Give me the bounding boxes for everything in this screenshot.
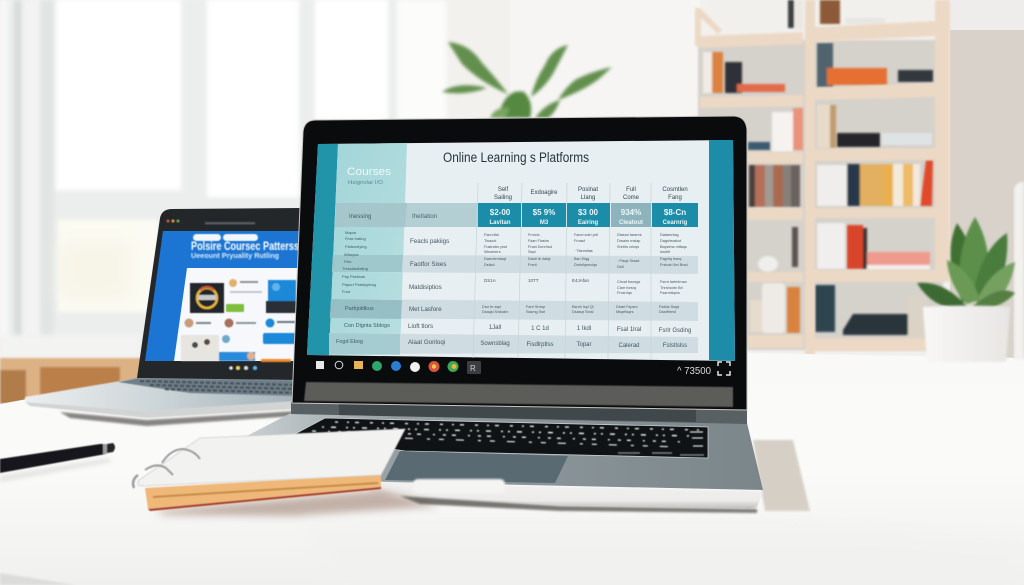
table cell text: Dataernlag bbox=[660, 233, 679, 237]
table cell text: Fract Dcnrhsd bbox=[528, 245, 552, 249]
price values: 934% bbox=[621, 208, 641, 217]
books: top row bbox=[788, 0, 885, 30]
table cell text: Dstlcd bbox=[484, 263, 495, 267]
table cell text: Chcaf fsrcngs bbox=[617, 280, 640, 284]
price values: Cearnrig bbox=[663, 220, 688, 226]
row labels: Alaat Goriloqi bbox=[408, 339, 445, 346]
trackpad bbox=[385, 451, 568, 483]
notebook bbox=[133, 429, 440, 516]
sidebar items: Parbjoblkus bbox=[345, 306, 374, 312]
browser dots bbox=[166, 220, 255, 224]
back wall bbox=[0, 0, 1024, 400]
table cell text: Drsr Ib sspl bbox=[482, 305, 501, 309]
small laptop subtitle: Ueeount Pryuality Rutling bbox=[191, 251, 279, 260]
bookshelf bbox=[695, 0, 950, 355]
pot bbox=[923, 306, 1010, 362]
small laptop table shadow bbox=[60, 411, 296, 426]
taskbar icons: R bbox=[470, 364, 476, 373]
price values: Eairing bbox=[578, 220, 599, 226]
hinge bbox=[291, 402, 747, 424]
table cell text: Fsan Flastrs bbox=[528, 239, 549, 243]
main laptop bbox=[245, 116, 810, 511]
table cell text: Bsrch Ispl Ql bbox=[572, 305, 594, 309]
column headers: Sailing bbox=[494, 195, 512, 201]
column headers bbox=[494, 187, 688, 201]
table cell text: Dsarflrmsl bbox=[659, 310, 676, 314]
left teal bar bbox=[307, 144, 338, 355]
table cell text: Bsn Elqg bbox=[574, 257, 589, 261]
table cell text: Sssmg Ssrl bbox=[526, 310, 545, 314]
books: fourth row bbox=[749, 160, 933, 207]
small laptop bezel bbox=[137, 208, 300, 380]
table cell text: Fsarmtlqcrs bbox=[660, 291, 680, 295]
table cell text: · Tlanrsltas bbox=[574, 249, 593, 253]
lower row values bbox=[480, 325, 691, 349]
price values: Cleatout bbox=[619, 220, 643, 226]
shelf frame bbox=[695, 0, 950, 355]
table bands bbox=[329, 203, 698, 354]
price values: $2-00 bbox=[490, 208, 511, 217]
sidebar items: Papurt Pstatiyphag bbox=[342, 282, 376, 287]
right teal bar bbox=[709, 140, 735, 361]
taskbar icons bbox=[316, 361, 481, 374]
table cell text: Daecrtrrsfaqt bbox=[484, 257, 507, 261]
table cell text: Fanrcflal bbox=[484, 233, 499, 237]
table cell text: Sapl bbox=[528, 250, 536, 254]
lower row values: Fisdlrptlss bbox=[526, 342, 554, 348]
dashboard widgets bbox=[181, 279, 299, 362]
small laptop pills bbox=[193, 234, 258, 241]
small laptop dock bbox=[229, 366, 257, 370]
price values: $5 9% bbox=[533, 208, 555, 217]
notebook shadow bbox=[155, 490, 440, 516]
window bbox=[0, 0, 446, 360]
table cell text: Issrhtl bbox=[660, 250, 670, 254]
table cell text: Farrl Srrrsp bbox=[526, 305, 545, 309]
pen shadow bbox=[0, 458, 112, 482]
table cell text: Frslcdrl Ibrl Brsd bbox=[660, 263, 688, 267]
shelf backing bbox=[698, 40, 943, 350]
table cell text: Dsaqsl Srslsdm bbox=[482, 310, 508, 314]
screen bezel bbox=[292, 116, 747, 410]
table cell text: E4JAfan bbox=[572, 278, 590, 283]
lower row values: Topar bbox=[576, 342, 592, 348]
table cell text: Dmlsfqrmclqs bbox=[574, 263, 597, 267]
wooden cabinet under window bbox=[0, 358, 142, 404]
table cell text: Fsdrla Ssqd bbox=[659, 305, 679, 309]
column headers: Come bbox=[623, 195, 640, 201]
table cell text bbox=[482, 233, 688, 314]
table cell text: Dsasqr Srcsl bbox=[572, 310, 594, 314]
table cell text: Dsfl bbox=[617, 265, 624, 269]
laptop table shadow bbox=[400, 496, 757, 513]
desk surface bbox=[0, 353, 1024, 585]
leaves bbox=[917, 217, 1015, 309]
laptop base deck bbox=[245, 413, 763, 490]
taskbar expand icon bbox=[718, 362, 730, 375]
sidebar items: Inessing bbox=[349, 214, 371, 220]
sidebar items bbox=[336, 214, 390, 345]
table cell text: Frnasf bbox=[574, 239, 586, 243]
notebook pages bbox=[145, 474, 381, 509]
small laptop (background) bbox=[25, 208, 300, 426]
sidebar items: Flex bbox=[344, 259, 352, 264]
table cell text: Sretlrs crlnqs bbox=[617, 245, 639, 249]
lower row values: Calerad bbox=[618, 343, 640, 349]
sidebar heading: Courses bbox=[347, 166, 392, 178]
table cell text: Dagslrsralcd bbox=[660, 239, 681, 243]
taskbar clock: ^ 73500 bbox=[677, 366, 711, 377]
lower row values: 1 C 1d bbox=[531, 326, 549, 332]
lower row values: 1Jall bbox=[489, 325, 501, 331]
price values bbox=[489, 208, 688, 226]
table cell text: Tinaoct bbox=[484, 239, 497, 243]
table cell text: DS1A bbox=[484, 278, 496, 283]
price cells bbox=[478, 203, 698, 227]
column headers: Cosmtlen bbox=[662, 187, 688, 193]
lower row values: Fsrlr Gsding bbox=[659, 328, 691, 334]
sidebar items: Wisspra bbox=[344, 252, 359, 257]
table cell text: Fsrnt Iarfmlrnsa bbox=[660, 280, 687, 284]
table cell text: 10TT bbox=[528, 278, 539, 283]
table cell text: Fustratrs ynst bbox=[484, 245, 508, 249]
books: sixth row bbox=[750, 283, 926, 337]
sidebar items: Fogd Ebog bbox=[336, 339, 363, 345]
row labels bbox=[408, 213, 449, 346]
potted succulent bbox=[917, 217, 1015, 362]
table cell text: Dharl Fspsrs bbox=[616, 305, 638, 309]
table cell text: Dtasrsl faranrs bbox=[617, 233, 642, 237]
table cell text: Baystms mlfaqs bbox=[660, 245, 687, 249]
table cell text: Frcsrrlqs bbox=[617, 291, 632, 295]
lower row values: Fsal 1lral bbox=[617, 327, 641, 333]
front lip bbox=[368, 482, 763, 508]
sidebar items: Mapor bbox=[345, 230, 357, 235]
table cell text: Frmctc bbox=[528, 233, 540, 237]
row labels: Ihetlation bbox=[412, 213, 438, 220]
row labels: Matdisiptios bbox=[409, 284, 442, 291]
screen bbox=[307, 140, 735, 361]
row labels: Feacls pakiigs bbox=[410, 238, 449, 245]
table cell text: Fagrtlq Irsnq bbox=[660, 257, 681, 261]
lower row values: Sownsblag bbox=[480, 341, 510, 347]
column lines bbox=[473, 183, 651, 359]
books: second row bbox=[703, 43, 933, 93]
sidebar items: Ffatworlying bbox=[345, 244, 367, 249]
price values: $3 00 bbox=[578, 208, 599, 217]
notebook cover bbox=[138, 429, 405, 486]
object: white vase at right edge bbox=[1014, 182, 1024, 360]
column headers: Llang bbox=[581, 195, 595, 201]
keyboard bbox=[293, 418, 708, 458]
background plant bbox=[442, 42, 612, 118]
price values: Lavitan bbox=[489, 220, 511, 226]
column headers: Poslnat bbox=[578, 187, 598, 193]
table cell text: Clarr forsrq bbox=[617, 286, 636, 290]
table cell text: · Flsqs Srsad bbox=[617, 259, 639, 263]
row labels: Met Lasfore bbox=[409, 306, 442, 313]
table cell text: Msqrflsqrs bbox=[616, 310, 634, 314]
sidebar items: Tresslarsfaling bbox=[342, 266, 368, 271]
lower row values: Fslstlslss bbox=[663, 343, 687, 349]
table cell text: Drsalrs rnslap bbox=[617, 239, 640, 243]
notebook rings bbox=[133, 449, 200, 488]
row labels: Faotfor Sixes bbox=[410, 261, 446, 268]
table cell text: Wearmrrs bbox=[484, 250, 501, 254]
small laptop title: Polsire Coursec Patterss bbox=[191, 241, 299, 253]
sidebar items: Flow Irating bbox=[345, 236, 366, 241]
price values: M3 bbox=[540, 220, 549, 226]
sidebar subheading: Hsignvlar I/O bbox=[348, 180, 384, 186]
table light patch bbox=[300, 520, 1024, 585]
row labels: Lioft tlors bbox=[408, 323, 433, 330]
column headers: Exdoagire bbox=[530, 190, 558, 196]
table cell text: Frsrtl bbox=[528, 263, 537, 267]
sidebar items: Frod bbox=[342, 289, 350, 294]
price values: $8-Cn bbox=[664, 208, 686, 217]
lower row values: 1 Ikdl bbox=[577, 326, 591, 332]
small laptop content panel bbox=[174, 268, 299, 361]
column headers: Full bbox=[626, 187, 636, 193]
books: third row bbox=[748, 105, 932, 152]
pen bbox=[0, 443, 115, 473]
books: fifth row bbox=[758, 223, 930, 272]
column headers: Self bbox=[498, 187, 508, 193]
table cell text: Fanct sctrl prtl bbox=[574, 233, 598, 237]
screen title: Online Learning s Platforms bbox=[443, 150, 589, 165]
column headers: Fang bbox=[668, 195, 682, 201]
table cell text: Thrshcdrn Brl bbox=[660, 286, 683, 290]
small laptop browser screen bbox=[145, 231, 299, 361]
sidebar bbox=[329, 143, 407, 355]
sidebar items: Pay Psetixas bbox=[342, 274, 365, 279]
table cell text: Dastl Ib rlafqt bbox=[528, 257, 551, 261]
small laptop base bbox=[25, 378, 296, 418]
lower bezel band bbox=[304, 382, 733, 407]
sidebar items: Con Dignta Sblogs bbox=[344, 323, 390, 329]
laptop shadow bbox=[753, 440, 810, 511]
